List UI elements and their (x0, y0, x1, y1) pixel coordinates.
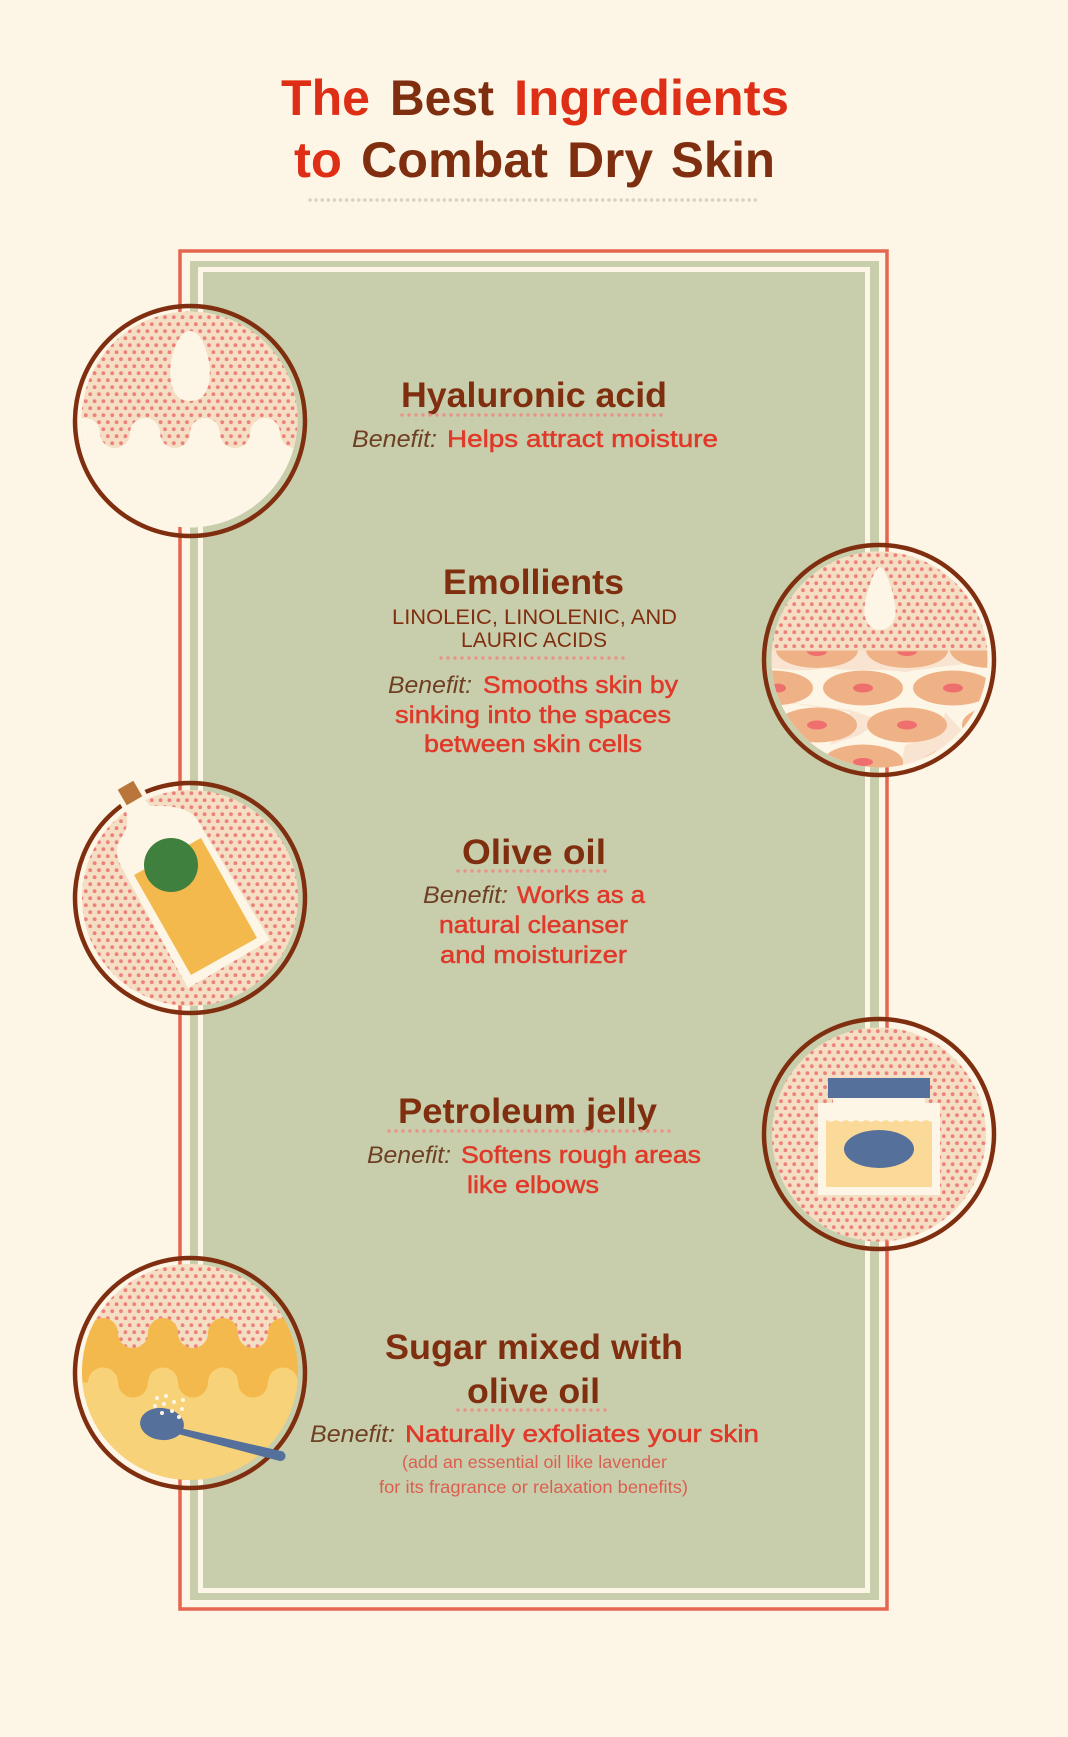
text block: hyaluronic acid: Helps attract moisture (447, 426, 718, 453)
text block: petroleum jelly: Softens rough areas (461, 1142, 701, 1169)
text block: olive oil: Works as a (517, 882, 646, 909)
text block: sugar mixed with olive oil: olive oil (467, 1372, 600, 1411)
text block: emollients: Smooths skin by (483, 672, 678, 699)
text block: sugar mixed with olive oil: Naturally exfoliates your skin (405, 1421, 759, 1448)
text block: sugar mixed with olive oil: for its fragrance or relaxation benefits) (379, 1477, 688, 1497)
text block: olive oil: natural cleanser (439, 912, 628, 939)
text block: olive oil (423, 833, 646, 969)
title: The (281, 70, 370, 126)
text block: sugar mixed with olive oil (310, 1328, 759, 1497)
text block: emollients: between skin cells (424, 731, 642, 758)
icon: olive oil circle (75, 774, 305, 1013)
panel: framed green background (180, 251, 887, 1609)
text block: petroleum jelly: Petroleum jelly (398, 1092, 658, 1131)
text block: hyaluronic acid: Hyaluronic acid (401, 376, 667, 415)
text block: emollients: Benefit: (388, 672, 472, 699)
text block: olive oil: Benefit: (423, 882, 508, 909)
title: Skin (671, 132, 775, 188)
text block: hyaluronic acid (352, 376, 718, 453)
text block: emollients: LINOLEIC, LINOLENIC, AND (392, 606, 677, 629)
title (281, 70, 789, 188)
text block: emollients: LAURIC ACIDS (461, 629, 607, 652)
title: Ingredients (514, 70, 789, 126)
text block: olive oil: Olive oil (462, 833, 606, 872)
text block: emollients: sinking into the spaces (395, 702, 671, 729)
text block: sugar mixed with olive oil: Benefit: (310, 1421, 395, 1448)
text block: petroleum jelly (367, 1092, 701, 1199)
icon: sugar scrub circle (72, 1256, 308, 1490)
text block: emollients: Emollients (443, 563, 624, 602)
icon: hyaluronic acid circle (60, 300, 310, 540)
text block: petroleum jelly: like elbows (467, 1172, 599, 1199)
title: Best (390, 70, 494, 126)
text block: sugar mixed with olive oil: (add an essential oil like lavender (402, 1452, 667, 1472)
text block: emollients (388, 563, 678, 758)
title: Combat (361, 132, 548, 188)
title: Dry (567, 132, 653, 188)
text block: petroleum jelly: Benefit: (367, 1142, 451, 1169)
icon: emollients circle (762, 542, 996, 778)
title: to (294, 132, 342, 188)
text block: hyaluronic acid: Benefit: (352, 426, 437, 453)
text block: sugar mixed with olive oil: Sugar mixed with (385, 1328, 683, 1367)
text block: olive oil: and moisturizer (440, 942, 627, 969)
icon: petroleum jelly circle (764, 1019, 994, 1249)
